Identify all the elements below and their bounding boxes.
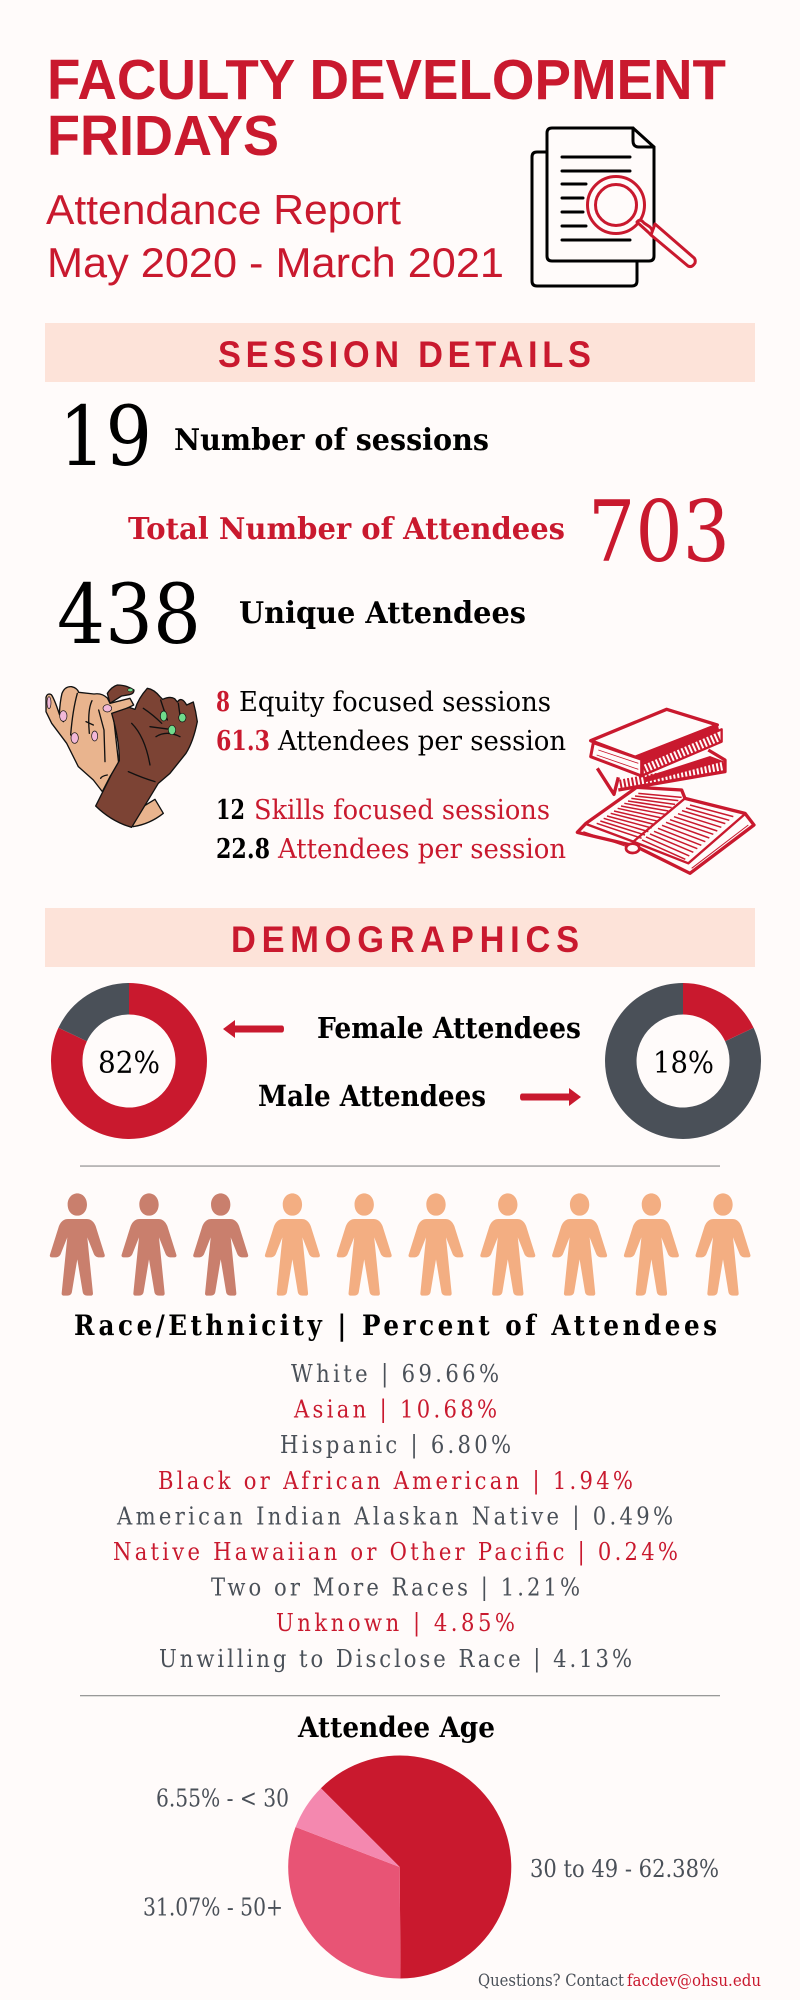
footer contact [478,1971,761,1991]
list: race and ethnicity percentages: Unknown | 4.85% [276,1610,515,1637]
stat: unique attendees [57,568,526,663]
title: FRIDAYS [47,104,279,168]
stat: number of sessions: 19 [59,390,152,485]
text block: equity sessions [216,687,566,757]
text block: skills sessions: Skills focused sessions [254,795,550,826]
text block: equity sessions: Attendees per session [277,726,566,757]
icon row: ten people [50,1193,751,1296]
list: race and ethnicity percentages: Hispanic | 6.80% [280,1432,511,1459]
list: race and ethnicity percentages: American Indian Alaskan Native | 0.49% [116,1503,673,1531]
chart: age pie [288,1756,511,1979]
title: FACULTY DEVELOPMENT [47,48,726,112]
text block: skills sessions: Attendees per session [277,834,566,865]
icon: document with magnifying glass [532,128,695,286]
subtitle: Attendance Report [46,186,401,233]
labels: age pie [143,1784,719,1922]
panel: session details heading: SESSION DETAILS [218,334,591,375]
text block: skills sessions: 12 [216,795,245,826]
footer contact: Questions? Contact [478,1971,624,1991]
stat: total attendees: Total Number of Attendees [128,512,565,547]
labels: age pie: 30 to 49 - 62.38% [530,1855,719,1883]
subtitle [46,186,504,286]
footer contact: facdev@ohsu.edu [627,1971,761,1991]
list: race and ethnicity percentages: Unwilling to Disclose Race | 4.13% [159,1646,632,1673]
panel: session details heading [45,323,755,382]
list: race and ethnicity percentages: White | 69.66% [291,1361,499,1388]
text block: skills sessions: 22.8 [216,834,270,865]
text block: skills sessions [216,795,566,865]
labels: age pie: 31.07% - 50+ [143,1894,283,1922]
chart: male donut 18% [605,983,761,1139]
stat: unique attendees: Unique Attendees [239,596,526,631]
list: race and ethnicity percentages [113,1361,678,1673]
chart: female donut 82%: 82% [98,1046,160,1081]
stat: total attendees [128,483,730,581]
labels: age pie: 6.55% - < 30 [156,1784,289,1812]
list: race and ethnicity percentages: Asian | 10.68% [293,1396,497,1424]
list: race and ethnicity percentages: Two or More Races | 1.21% [211,1574,580,1602]
panel: demographics heading: DEMOGRAPHICS [231,919,579,960]
icon: linked hands [46,685,197,827]
heading: race and ethnicity: Race/Ethnicity | Percent of Attendees [74,1310,717,1342]
subtitle: May 2020 - March 2021 [47,239,504,286]
chart: female donut 82% [51,983,207,1139]
text block: equity sessions: 8 [216,687,230,718]
label: female attendees: Female Attendees [317,1011,581,1045]
list: race and ethnicity percentages: Black or African American | 1.94% [158,1468,633,1495]
stat: number of sessions: Number of sessions [174,423,489,458]
stat: total attendees: 703 [588,483,730,581]
icon: books [577,709,754,873]
heading: attendee age: Attendee Age [297,1711,495,1744]
chart: male donut 18%: 18% [653,1046,714,1081]
arrow: to female donut [223,1020,284,1038]
stat: unique attendees: 438 [57,568,201,663]
arrow: to male donut [520,1088,581,1106]
stat: number of sessions [59,390,489,485]
text block: equity sessions: Equity focused sessions [239,687,551,718]
label: male attendees: Male Attendees [258,1079,486,1113]
list: race and ethnicity percentages: Native Hawaiian or Other Pacific | 0.24% [113,1539,678,1566]
text block: equity sessions: 61.3 [216,726,270,757]
title [47,48,726,168]
panel: demographics heading [45,908,755,967]
